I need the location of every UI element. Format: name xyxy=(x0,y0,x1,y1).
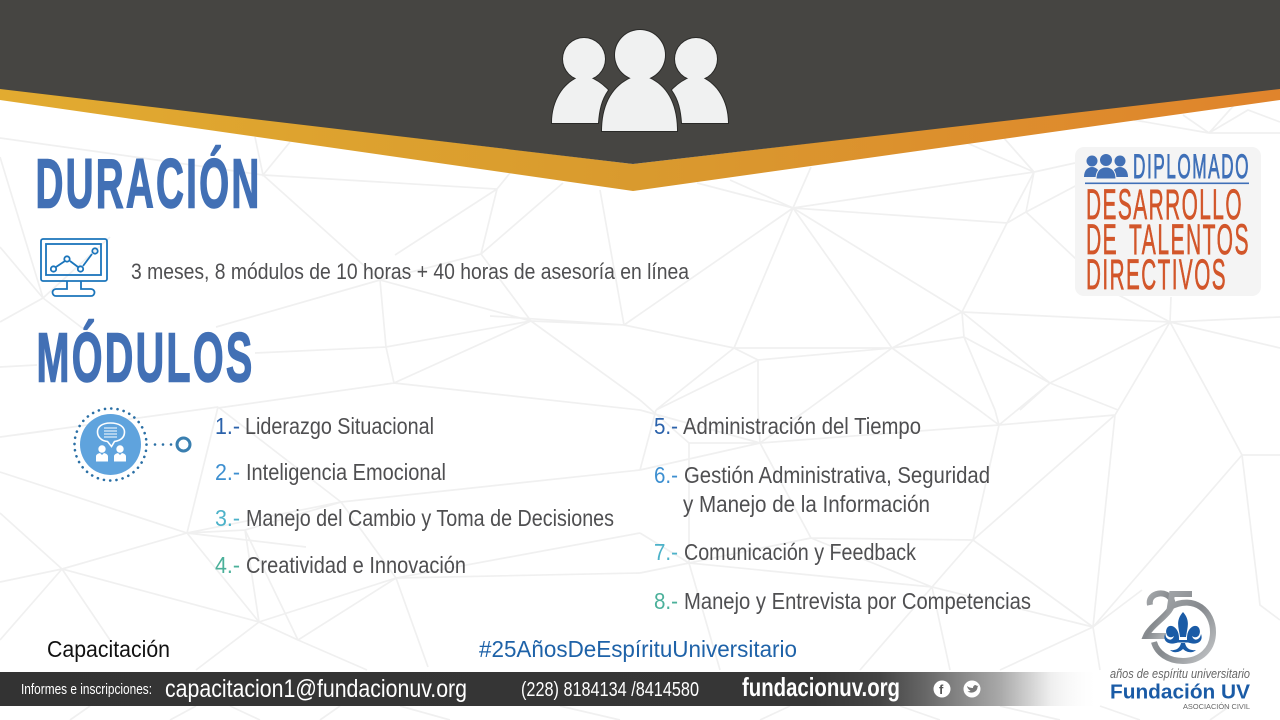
module 1: 1.- xyxy=(215,413,240,439)
gold chevron band xyxy=(0,88,1280,191)
module list: left column xyxy=(215,413,614,578)
logo: Fundación UV 25 años xyxy=(1110,593,1250,711)
phone: (228) 8184134 /8414580 xyxy=(521,679,699,701)
footer contact bar xyxy=(0,672,1100,706)
duration text: 3 meses, 8 módulos de 10 horas + 40 horas de asesoría en línea xyxy=(131,259,690,284)
icon: facebook xyxy=(934,680,950,698)
module 6 xyxy=(654,462,990,517)
hashtag: #25AñosDeEspírituUniversitario xyxy=(479,636,797,662)
logo tagline: años de espíritu universitario xyxy=(1110,666,1250,681)
silver 25 ring xyxy=(1146,593,1213,661)
module 4: 4.- xyxy=(215,552,240,578)
module 8: 8.- xyxy=(654,588,678,614)
logo subtitle: ASOCIACIÓN CIVIL xyxy=(1183,702,1250,711)
fleur-de-lis xyxy=(1164,612,1202,652)
icon: twitter xyxy=(964,680,980,698)
module 7: Comunicación y Feedback xyxy=(684,539,916,565)
module 2: Inteligencia Emocional xyxy=(246,459,446,485)
icon: monitor with line chart xyxy=(41,239,107,296)
module 3: 3.- xyxy=(215,505,240,531)
module 5: 5.- xyxy=(654,413,678,439)
icon: facebook: f xyxy=(939,682,944,697)
informes label: Informes e inscripciones: xyxy=(21,681,152,698)
module 1: Liderazgo Situacional xyxy=(245,413,434,439)
module 7: 7.- xyxy=(654,539,678,565)
logo name: Fundación UV xyxy=(1110,680,1250,704)
icon: group of three people xyxy=(552,30,728,131)
heading: Duración: DURACIÓN xyxy=(36,144,262,222)
heading: Módulos: MÓDULOS xyxy=(36,318,254,396)
module 2: 2.- xyxy=(215,459,240,485)
module 6: y Manejo de la Información xyxy=(683,491,930,517)
module 6: Gestión Administrativa, Seguridad xyxy=(684,462,990,488)
badge: Diplomado Desarrollo de Talentos Directivos xyxy=(1075,147,1261,299)
module list: right column xyxy=(654,413,1031,614)
module 6: 6.- xyxy=(654,462,678,488)
module 3: Manejo del Cambio y Toma de Decisiones xyxy=(246,505,614,531)
email: capacitacion1@fundacionuv.org xyxy=(165,675,467,703)
module 8: Manejo y Entrevista por Competencias xyxy=(684,588,1031,614)
module 4: Creatividad e Innovación xyxy=(246,552,466,578)
icon: people talking in dotted circle xyxy=(74,408,190,480)
dark header xyxy=(0,0,1280,164)
website: fundacionuv.org xyxy=(742,672,900,702)
top dark banner with gold chevron xyxy=(0,0,1280,191)
badge people icon xyxy=(1084,154,1128,179)
label: Capacitación: Capacitación xyxy=(47,636,170,662)
module 5: Administración del Tiempo xyxy=(683,413,921,439)
